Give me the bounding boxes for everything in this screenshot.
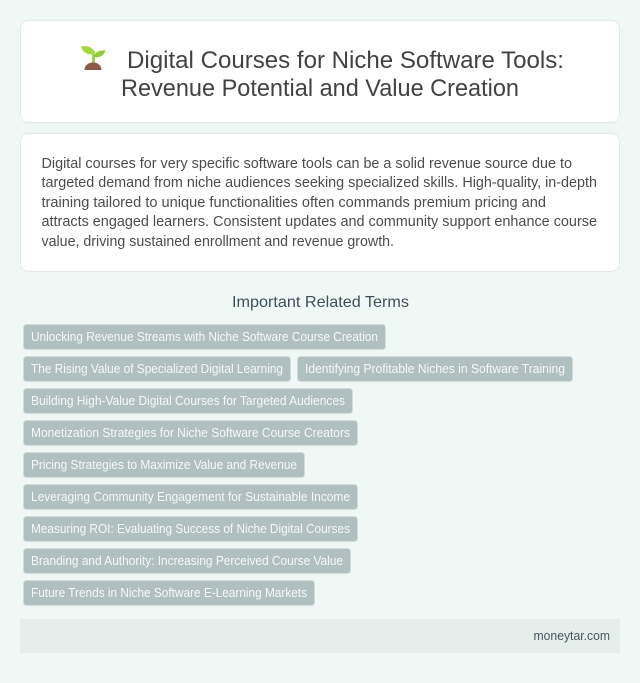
title: Revenue Potential and Value Creation (121, 75, 519, 102)
tag 7 (24, 484, 358, 510)
tag 9: Branding and Authority: Increasing Perceived Course Value (31, 553, 343, 568)
footer source text: moneytar.com (534, 628, 610, 643)
tag 6: Pricing Strategies to Maximize Value and Revenue (31, 457, 297, 472)
icon: seedling (81, 46, 106, 70)
tag 10: Future Trends in Niche Software E-Learning Markets (31, 585, 307, 600)
tag 1 (24, 324, 386, 350)
tag 8: Measuring ROI: Evaluating Success of Niche Digital Courses (31, 521, 350, 536)
tag 5: Monetization Strategies for Niche Software Course Creators (31, 425, 350, 440)
tag list (24, 324, 572, 606)
tag 4 (24, 388, 352, 414)
panel: title card (20, 20, 620, 122)
heading: related terms: Important Related Terms (232, 294, 409, 311)
text block: summary paragraph: training tailored to unique functionalities often commands premium pricing and (42, 194, 546, 211)
tag 2 (24, 356, 290, 382)
tag 9 (24, 548, 350, 574)
tag 8 (24, 516, 358, 542)
text block: summary paragraph: value, driving sustained enrollment and revenue growth. (42, 233, 394, 250)
text block: summary paragraph: Digital courses for very specific software tools can be a solid revenue source due to (42, 155, 572, 172)
tag 1: Unlocking Revenue Streams with Niche Software Course Creation (31, 329, 378, 344)
tag 4: Building High-Value Digital Courses for Targeted Audiences (31, 393, 345, 408)
tag 3 (298, 356, 572, 382)
text block: summary paragraph: targeted demand from niche audiences seeking specialized skills. High-quality, in-depth (42, 174, 597, 191)
tag 5 (24, 420, 358, 446)
tag 10 (24, 580, 314, 606)
tag 6 (24, 452, 304, 478)
tag 7: Leveraging Community Engagement for Sustainable Income (31, 489, 350, 504)
panel: summary (20, 134, 620, 272)
title: Digital Courses for Niche Software Tools: (127, 47, 564, 74)
tag 2: The Rising Value of Specialized Digital Learning (31, 361, 283, 376)
footer (20, 619, 620, 653)
text block: summary paragraph: attracts engaged learners. Consistent updates and community support enhance course (42, 213, 597, 230)
tag 3: Identifying Profitable Niches in Software Training (305, 361, 565, 376)
